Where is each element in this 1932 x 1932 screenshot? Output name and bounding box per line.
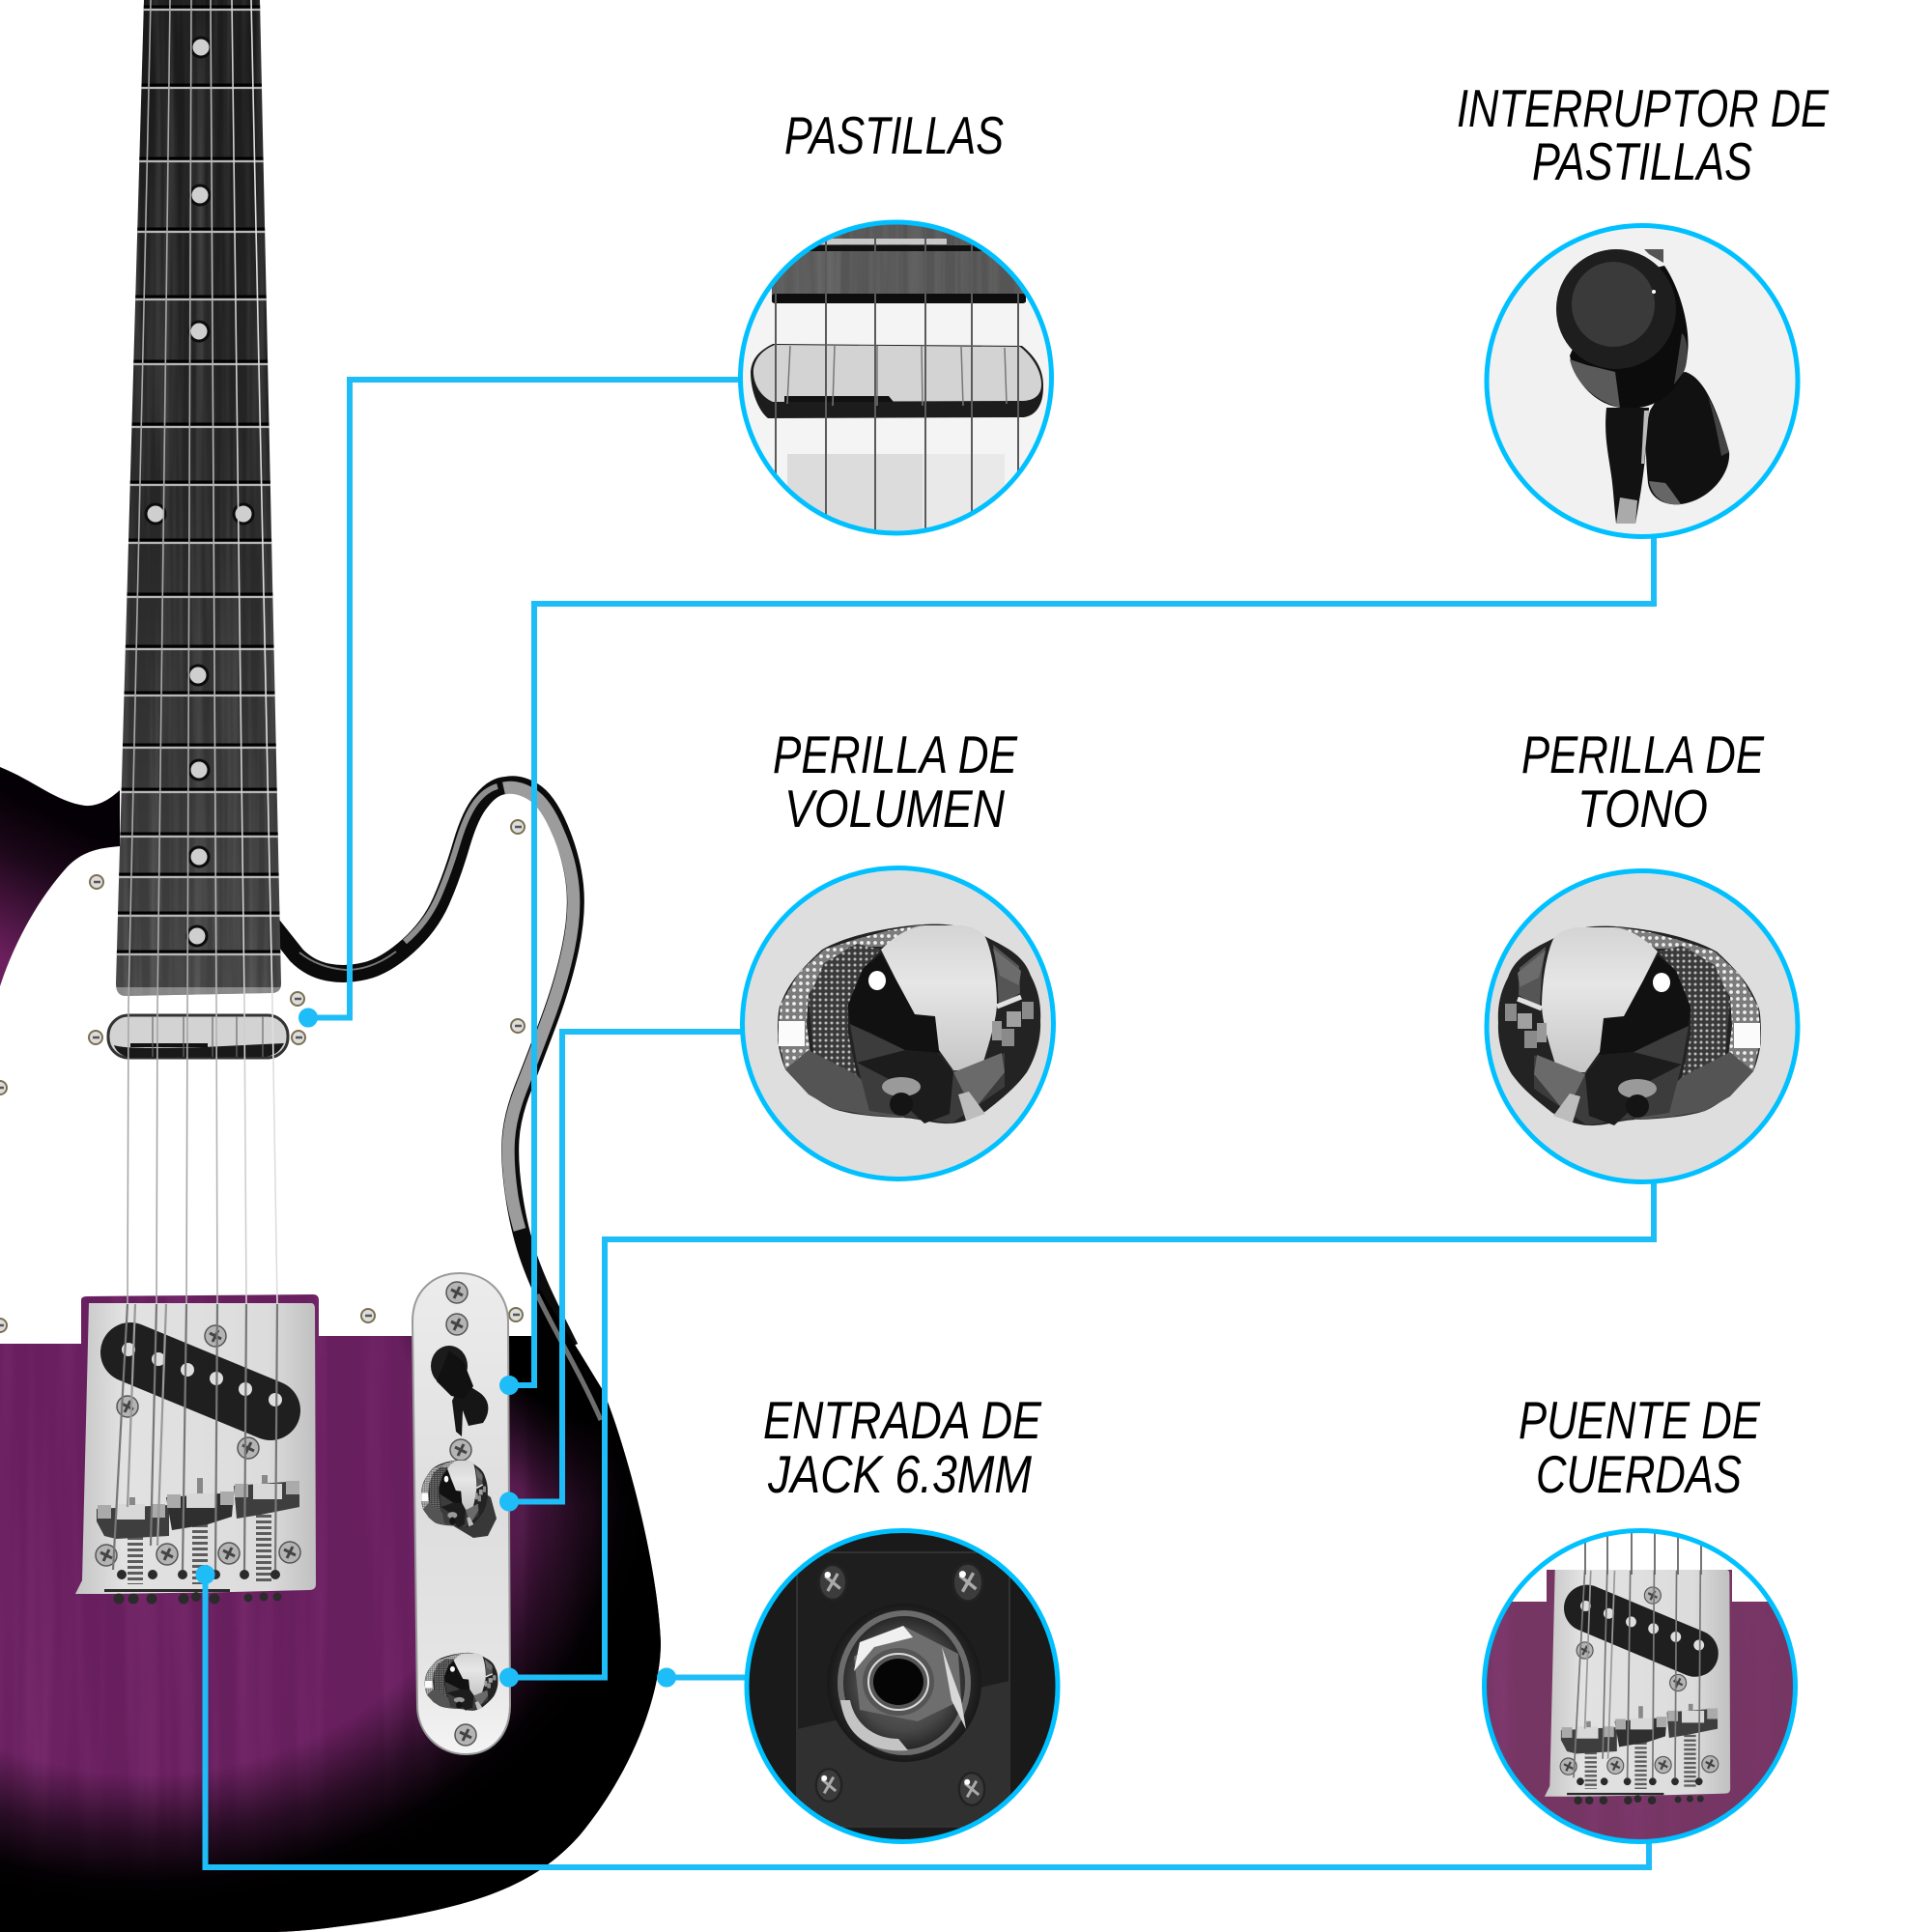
guitar upper horn <box>0 767 120 986</box>
guitar body sunburst <box>0 1256 696 1932</box>
inset ring <box>1484 1530 1795 1841</box>
switch lever <box>1605 408 1649 524</box>
pickup cover <box>751 344 1043 418</box>
switch base <box>1646 372 1729 504</box>
inset: pastillas <box>734 217 1063 541</box>
bridge pickup <box>122 1343 282 1410</box>
frets <box>116 6 280 956</box>
title: perilla de tono: PERILLA DE <box>1521 725 1765 784</box>
title: interruptor de pastillas: INTERRUPTOR DE <box>1457 79 1830 138</box>
bridge assembly zoomed <box>1545 1570 1730 1804</box>
strings <box>776 217 1018 541</box>
inset ring <box>740 222 1051 533</box>
strings over bridge <box>113 1304 277 1570</box>
jack plate screws <box>816 1563 984 1805</box>
title: entrada de jack: ENTRADA DE <box>763 1391 1042 1450</box>
control plate screws <box>446 1282 476 1746</box>
neck pickup <box>108 1015 288 1058</box>
title: perilla de tono line 2: TONO <box>1577 780 1708 838</box>
jack hex nut <box>854 1626 961 1721</box>
inset: puente de cuerdas <box>1478 1526 1802 1850</box>
volume knob <box>421 1460 497 1538</box>
bridge saddles <box>97 1475 299 1604</box>
jack hole <box>873 1659 923 1705</box>
fret inlays <box>146 38 253 946</box>
pickup selector switch <box>431 1346 488 1436</box>
connector: pastillas <box>300 380 744 1026</box>
inset ring <box>1487 871 1798 1182</box>
title: puente de cuerdas line 2: CUERDAS <box>1536 1445 1742 1504</box>
title: puente de cuerdas: PUENTE DE <box>1519 1391 1761 1450</box>
inset: perilla de volumen <box>739 865 1058 1183</box>
connector: perilla de volumen <box>501 1032 744 1509</box>
inset ring <box>1487 226 1798 537</box>
inset: perilla de tono <box>1483 867 1802 1186</box>
tone knob <box>425 1653 497 1711</box>
guitar body edge binding <box>270 784 576 1348</box>
connector: perilla de tono <box>501 1181 1654 1685</box>
control plate <box>412 1273 510 1754</box>
strings above bridge <box>128 0 277 1304</box>
switch knob <box>1556 249 1689 408</box>
jack dome <box>837 1616 981 1762</box>
bridge screws <box>96 1325 300 1566</box>
title: perilla de volumen line 2: VOLUMEN <box>784 780 1006 838</box>
title: perilla de volumen: PERILLA DE <box>773 725 1018 784</box>
pickguard screws <box>0 820 525 1332</box>
title: interruptor de pastillas line 2: PASTILLAS <box>1532 132 1752 191</box>
guitar photo <box>0 0 696 1932</box>
strings <box>1585 1529 1701 1575</box>
inset ring <box>742 867 1053 1179</box>
inset ring <box>747 1530 1058 1841</box>
title: pastillas: PASTILLAS <box>784 106 1004 165</box>
title: entrada de jack line 2: JACK 6.3MM <box>767 1445 1033 1504</box>
bridge assembly <box>75 1303 316 1604</box>
connector: interruptor de pastillas <box>501 536 1654 1393</box>
bridge plate <box>75 1303 316 1594</box>
inset: entrada de jack <box>744 1526 1063 1847</box>
fretboard <box>116 0 281 996</box>
connector: puente de cuerdas <box>197 1567 1649 1867</box>
connector: entrada de jack <box>659 1669 749 1685</box>
inset: interruptor de pastillas <box>1483 222 1802 541</box>
